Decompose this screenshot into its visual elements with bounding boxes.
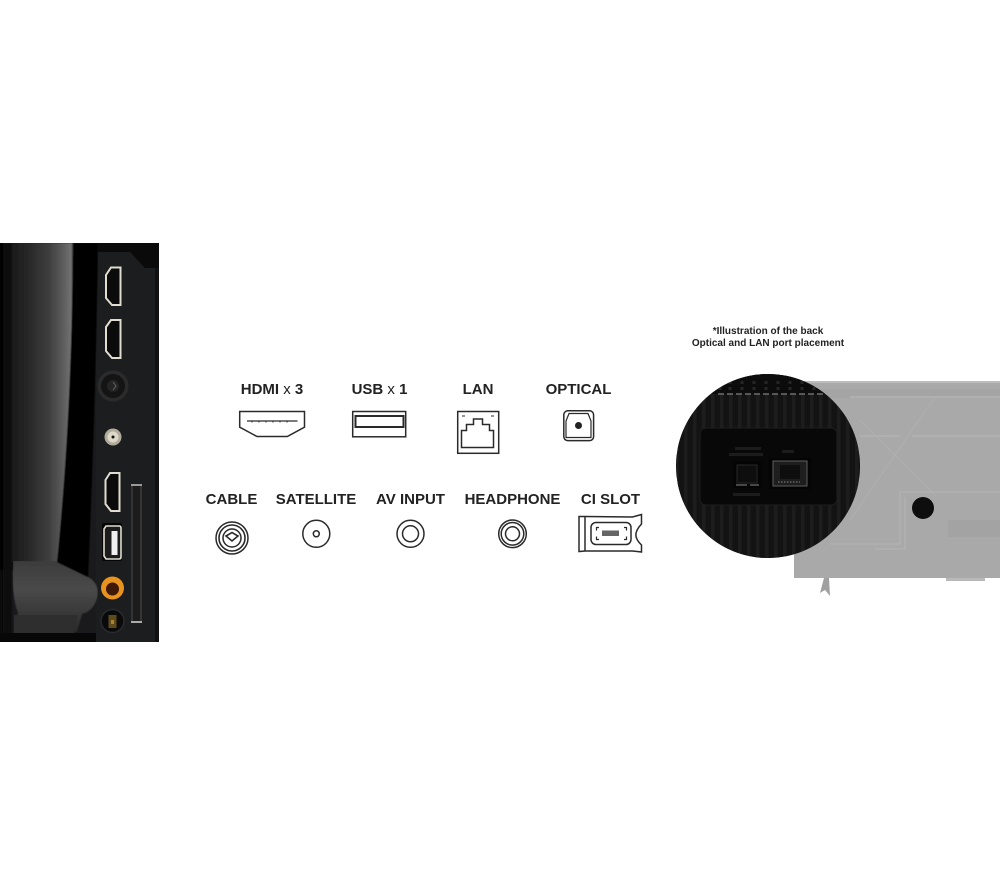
- TV rear port cutout: [912, 497, 934, 519]
- heading: HDMI x 3: HDMI x 3: [241, 381, 303, 398]
- port: orange AV socket: [101, 576, 124, 600]
- heading: LAN: LAN: [463, 381, 493, 398]
- heading: SATELLITE: SATELLITE: [276, 491, 356, 508]
- heading: CABLE: CABLE: [206, 491, 257, 508]
- optical port: [733, 461, 762, 488]
- port: CI slot: [131, 484, 142, 623]
- heading: CI SLOT: CI SLOT: [581, 491, 640, 508]
- TV stand leg: [820, 578, 830, 596]
- stand neck: [0, 243, 98, 642]
- port: HDMI 3: [106, 473, 120, 511]
- icon: USB: [353, 412, 406, 437]
- icon: SATELLITE: [303, 520, 330, 547]
- port: headphone socket: [101, 610, 124, 632]
- heading: OPTICAL: OPTICAL: [546, 381, 611, 398]
- panel: TV rear illustration: [794, 381, 1000, 596]
- panel: TV side connector photo: [0, 243, 159, 642]
- port: USB: [102, 523, 122, 561]
- heading: USB x 1: USB x 1: [352, 381, 407, 398]
- port: HDMI 2: [106, 320, 120, 358]
- stand foot: [13, 561, 98, 632]
- icon: CABLE: [216, 522, 248, 554]
- panel: magnified port callout: [676, 374, 860, 558]
- port: HDMI 1: [106, 268, 120, 305]
- note: illustration caption: Optical and LAN port placement: [692, 338, 845, 349]
- LAN port: [769, 458, 811, 489]
- port recess: [700, 428, 837, 505]
- port: satellite socket: [104, 428, 122, 446]
- note: illustration caption: *Illustration of the back: [713, 326, 824, 337]
- icon: HDMI: [240, 412, 304, 436]
- icon: OPTICAL: [564, 411, 594, 441]
- port: cable socket: [98, 370, 128, 402]
- icon: LAN: [458, 412, 499, 453]
- icon: HEADPHONE: [499, 520, 526, 548]
- icon: AV INPUT: [397, 520, 424, 547]
- icon: CI SLOT: [579, 514, 642, 552]
- note: illustration caption: [692, 326, 845, 349]
- heading: HEADPHONE: HEADPHONE: [465, 491, 560, 508]
- heading: AV INPUT: AV INPUT: [376, 491, 445, 508]
- port labels: [729, 447, 794, 496]
